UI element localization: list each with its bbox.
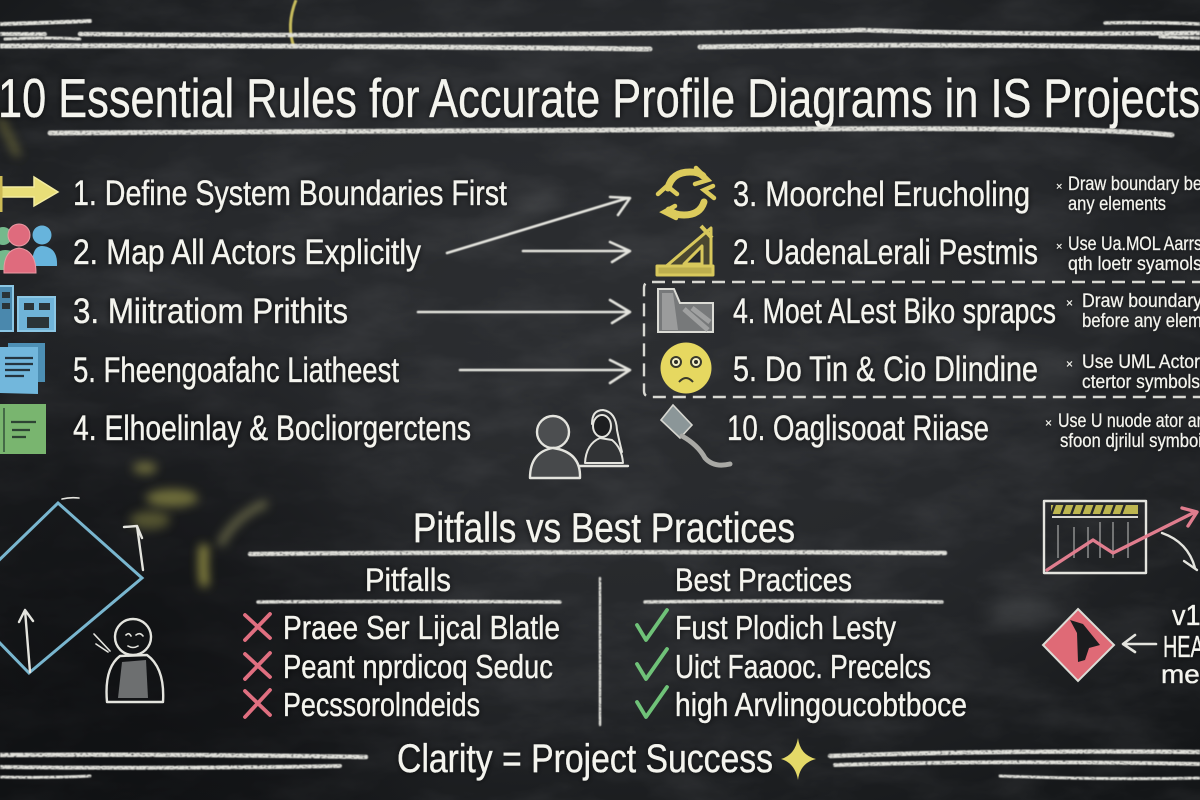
top chalk border lines bbox=[0, 21, 1200, 49]
heading underline bbox=[250, 552, 945, 554]
pitfalls heading: Pitfalls bbox=[365, 562, 451, 598]
dark corner shading bbox=[0, 300, 500, 800]
rule 10: 10. Oaglisooat Riiase bbox=[727, 409, 989, 448]
icon: grey folder bbox=[658, 289, 713, 332]
heading: pitfalls vs best practices: Pitfalls vs Best Practices bbox=[413, 504, 795, 551]
arrow 2 bbox=[523, 242, 630, 262]
pitfalls items: Praee Ser Lijcal Blatle bbox=[283, 609, 560, 646]
check marks bbox=[637, 610, 667, 717]
note 2: × bbox=[1056, 241, 1062, 253]
note 2 bbox=[1056, 234, 1200, 275]
pitfalls underline bbox=[258, 600, 560, 604]
title underline bbox=[50, 129, 1172, 135]
note 5 bbox=[1045, 411, 1200, 452]
note 3: × bbox=[1066, 296, 1073, 310]
rule 4: 4. Elhoelinlay & Bocliorgerctens bbox=[73, 409, 471, 448]
icon: group of actors bbox=[0, 224, 57, 273]
version label bbox=[1161, 600, 1200, 689]
best practices items: Uict Faaooc. Precelcs bbox=[675, 648, 931, 685]
pitfalls items: Pecssorolndeids bbox=[283, 686, 480, 723]
icon: yellow cycle arrows bbox=[658, 168, 714, 218]
icon: worried face bbox=[660, 342, 712, 394]
chalk smudges bbox=[0, 0, 1080, 626]
column: best practices bbox=[637, 562, 967, 723]
best practices items bbox=[675, 609, 967, 723]
note 4 bbox=[1066, 352, 1200, 393]
note 4: × bbox=[1066, 357, 1073, 371]
rule 3: 3. Miitratiom Prithits bbox=[73, 292, 348, 331]
note 1: × bbox=[1056, 181, 1062, 193]
diagram: blue boundary diamond bbox=[0, 498, 143, 673]
best practices underline bbox=[645, 601, 942, 602]
rule 2: 2. Map All Actors Explicitly bbox=[73, 233, 421, 272]
rule 3 right: 3. Moorchel Erucholing bbox=[733, 175, 1030, 214]
icon: chalk person bbox=[94, 619, 163, 702]
icon: yellow set square bbox=[657, 226, 713, 275]
dashed highlight box bbox=[644, 282, 1200, 397]
icon: two chalk people bbox=[530, 410, 628, 478]
note 3 bbox=[1066, 291, 1200, 332]
right-side notes bbox=[1045, 174, 1200, 452]
rule 5 right: 5. Do Tin & Cio Dlindine bbox=[733, 350, 1038, 389]
rule 2 right: 2. UadenaLerali Pestmis bbox=[733, 233, 1038, 272]
chart sketch bbox=[1044, 501, 1197, 573]
rule 1: 1. Define System Boundaries First bbox=[73, 174, 507, 213]
rule 4 right: 4. Moet ALest Biko sprapcs bbox=[733, 292, 1056, 331]
note 5: × bbox=[1045, 416, 1052, 430]
best practices heading: Best Practices bbox=[675, 562, 852, 598]
column: pitfalls bbox=[245, 562, 560, 723]
icon: building blocks bbox=[0, 286, 55, 331]
icon: blue document bbox=[0, 343, 45, 394]
pitfalls items: Peant nprdicoq Seduc bbox=[283, 648, 553, 685]
note 1: any elements bbox=[1068, 194, 1166, 215]
pitfalls items bbox=[283, 609, 560, 723]
note 1 bbox=[1056, 174, 1200, 215]
arrow 4 bbox=[460, 360, 630, 383]
best practices items: Fust Plodich Lesty bbox=[675, 609, 896, 646]
best practices items: high Arvlingoucobtboce bbox=[675, 686, 967, 723]
left rules list bbox=[73, 174, 507, 448]
arrow 3 bbox=[418, 300, 630, 323]
bottom chalk border lines bbox=[0, 752, 1200, 779]
arrow 1 bbox=[447, 197, 630, 253]
x marks bbox=[245, 614, 270, 717]
curved arrow bbox=[1162, 533, 1197, 570]
rule 5: 5. Fheengoafahc Liatheest bbox=[73, 351, 399, 390]
arrows from left to right list bbox=[418, 197, 630, 383]
vertical divider bbox=[599, 578, 601, 725]
icon: yellow sparkle bbox=[781, 738, 816, 780]
pointer arrow to head bbox=[1123, 635, 1156, 652]
right rules list bbox=[727, 175, 1056, 448]
icon: yellow arrow bbox=[0, 176, 58, 212]
footer text: Clarity = Project Success bbox=[397, 737, 773, 781]
icon: green note bbox=[0, 404, 46, 454]
icon: chalk tool bbox=[661, 405, 730, 465]
icon: git diamond bbox=[1043, 609, 1114, 681]
